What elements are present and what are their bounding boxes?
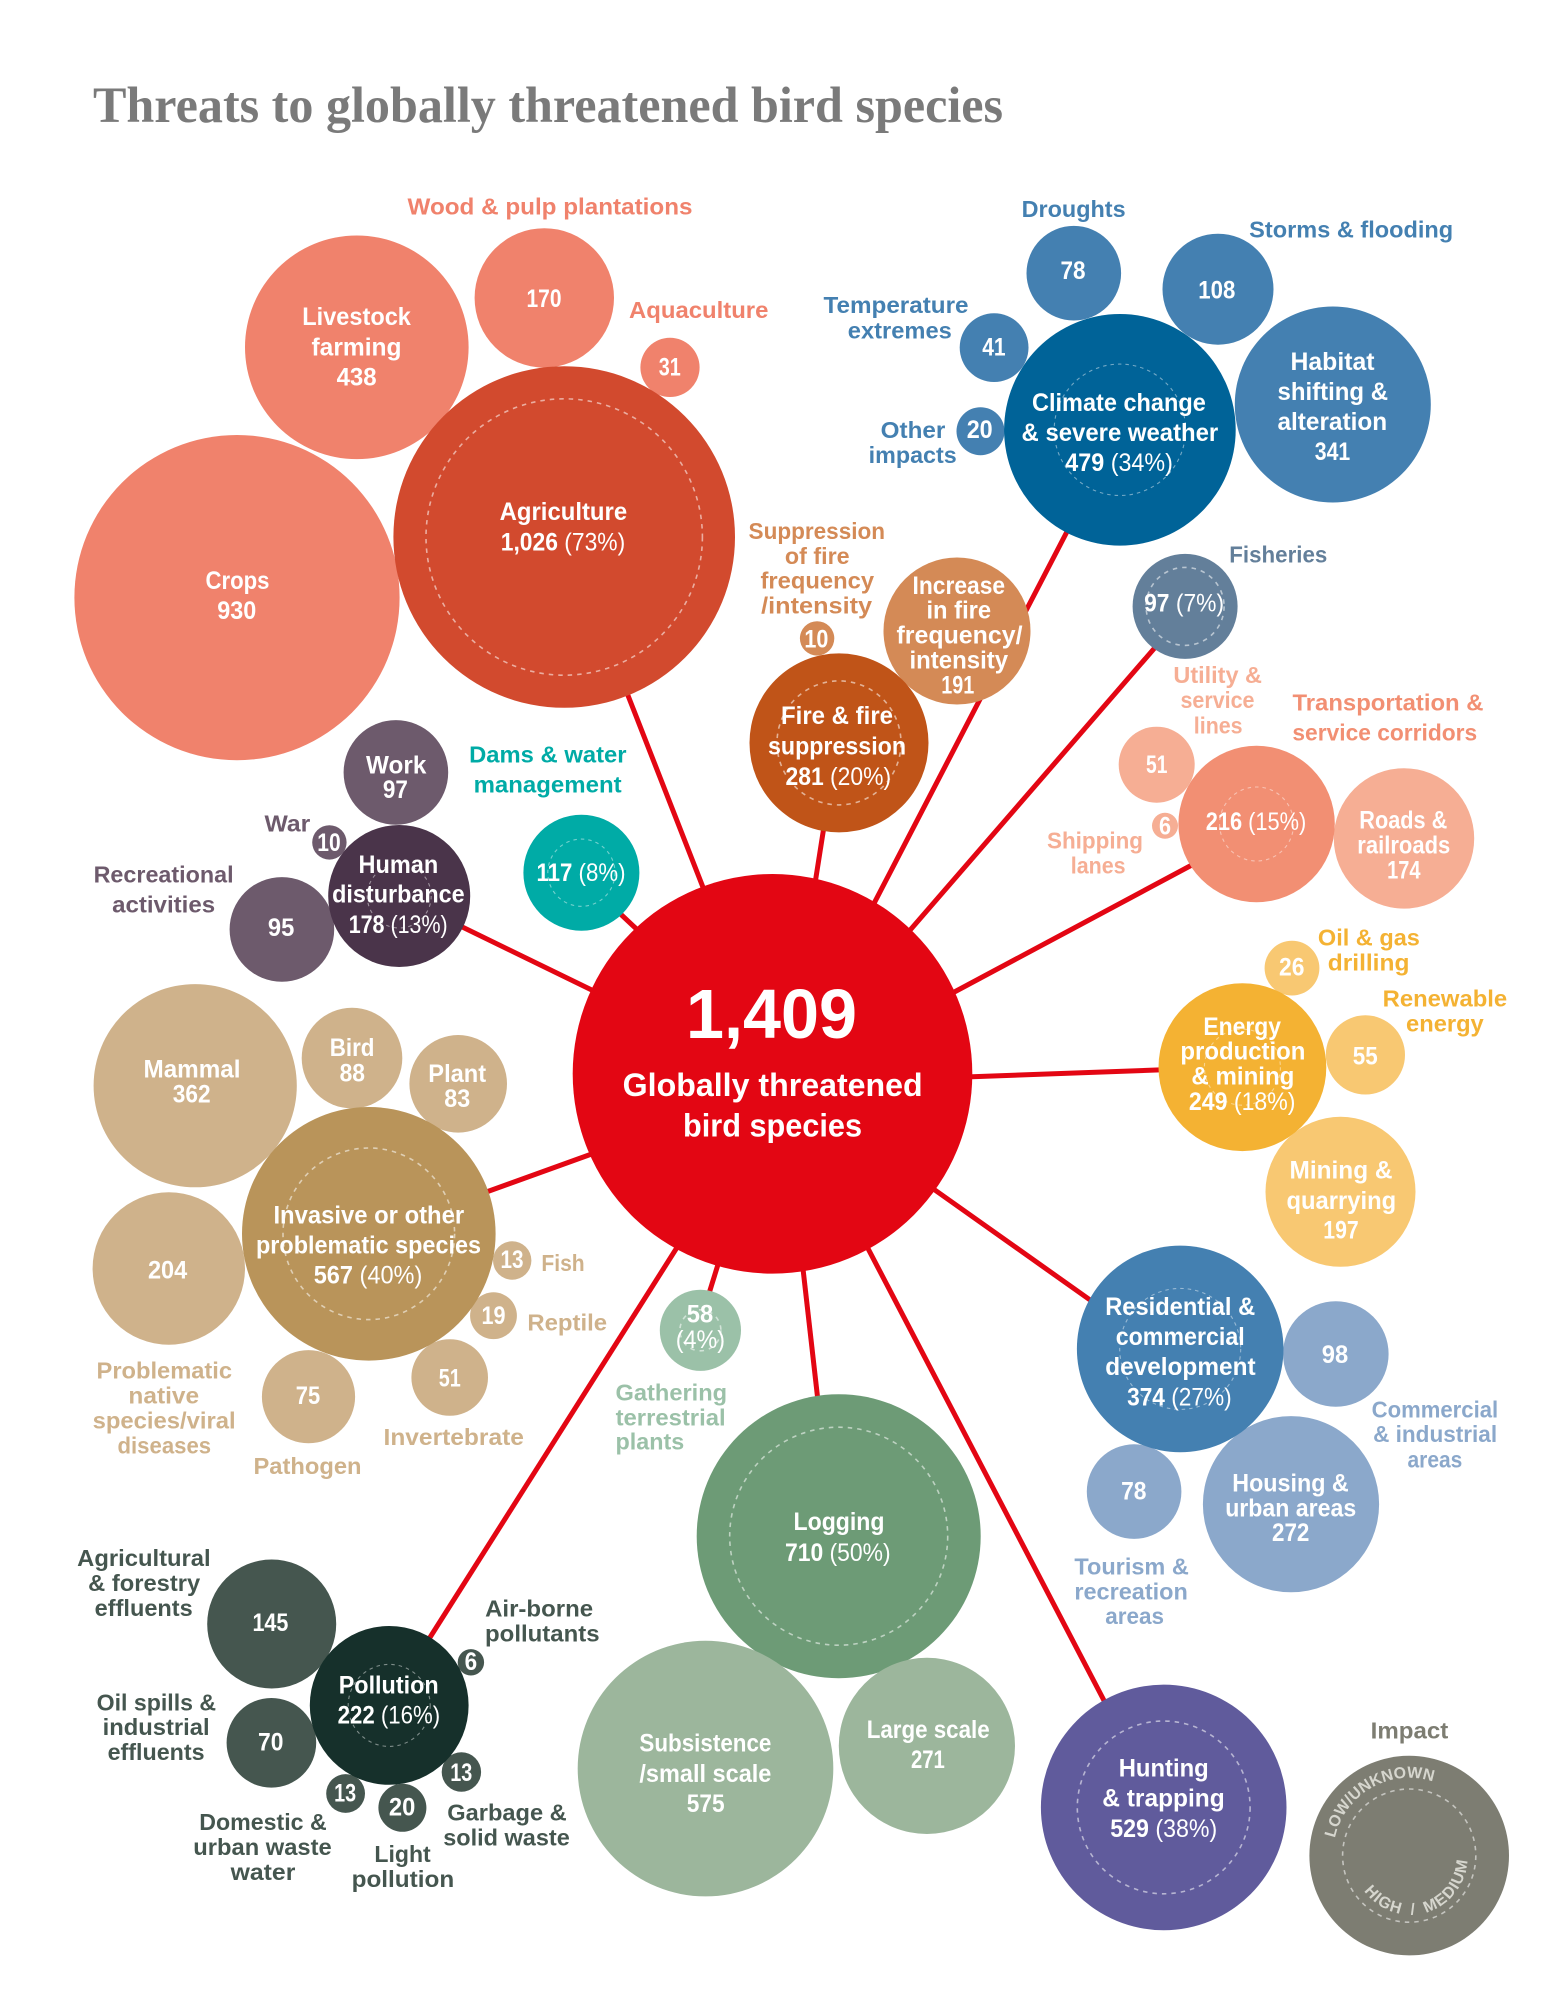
bubble: housing and urban areas <box>1203 1416 1379 1592</box>
bubble: increase in fire: in fire <box>926 597 991 625</box>
label: agricultural and forestry effluents: & forestry <box>88 1570 200 1596</box>
panel: central total <box>573 874 972 1274</box>
bubble: energy production and mining: & mining <box>1191 1063 1294 1091</box>
bubble: aquaculture <box>640 338 700 397</box>
legend heading: Impact <box>1371 1718 1449 1744</box>
label: gathering terrestrial plants: plants <box>616 1428 684 1454</box>
bubble: energy production and mining: Energy <box>1203 1013 1281 1041</box>
bubble: agriculture: 1,026 (73%) <box>501 529 625 557</box>
bubble: habitat shifting: Habitat <box>1290 348 1375 376</box>
bubble: light pollution: 20 <box>389 1793 415 1821</box>
bubble: recreational activities <box>230 877 334 982</box>
bubble: fish <box>493 1241 531 1280</box>
bubble: invasive or other problematic species: Invasive or other <box>273 1202 464 1230</box>
bubble: livestock farming: farming <box>312 333 402 361</box>
bubble: human disturbance <box>328 825 470 967</box>
connector: fisheries <box>905 636 1165 936</box>
connector: transportation <box>945 858 1205 997</box>
label: fish: Fish <box>541 1250 585 1276</box>
bubble: bird <box>302 1008 402 1108</box>
bubble: fish: 13 <box>500 1246 524 1274</box>
label: suppression of fire: Suppression <box>749 518 885 544</box>
bubble: large scale: Large scale <box>867 1716 990 1744</box>
bubble: increase in fire: frequency/ <box>896 621 1023 649</box>
bubble: increase in fire <box>884 558 1030 704</box>
bubble: roads and railroads: Roads & <box>1359 806 1447 834</box>
label: recreational activities: Recreational <box>94 861 234 887</box>
label: garbage and solid waste <box>443 1800 570 1851</box>
connector: pollution <box>422 1238 683 1650</box>
label: suppression of fire: of fire <box>785 543 850 569</box>
bubble: reptile: 19 <box>482 1302 506 1330</box>
bubble: renewable energy: 55 <box>1353 1042 1378 1070</box>
label: utility and service lines <box>1173 662 1262 738</box>
bubble: roads and railroads: 174 <box>1387 856 1421 884</box>
label: temperature extremes <box>824 292 968 343</box>
panel: fire cluster <box>749 518 1030 832</box>
bubble: agriculture <box>393 366 735 708</box>
bubble: pollution <box>310 1626 469 1785</box>
bubble: gathering terrestrial plants: (4%) <box>676 1326 725 1354</box>
panel: central total: bird species <box>683 1108 862 1144</box>
bubble: dams and water management <box>523 815 639 931</box>
label: transportation and service corridors <box>1292 690 1484 746</box>
label: air-borne pollutants: pollutants <box>485 1621 600 1647</box>
label: tourism and recreation areas: recreation <box>1074 1578 1188 1604</box>
bubble: aquaculture: 31 <box>659 354 681 382</box>
label: agricultural and forestry effluents <box>77 1545 211 1621</box>
label: renewable energy: energy <box>1406 1010 1484 1036</box>
title: Threats to globally threatened bird species <box>93 78 1003 134</box>
bubble: bird: Bird <box>330 1034 374 1062</box>
bubble: work <box>344 720 448 825</box>
bubble: energy production and mining: 249 (18%) <box>1189 1088 1296 1116</box>
bubble: work: 97 <box>383 776 408 804</box>
connector: human disturbance <box>450 921 602 995</box>
bubble: increase in fire: 191 <box>941 672 974 700</box>
bubble: war <box>312 825 347 860</box>
label: utility and service lines: service <box>1180 687 1254 713</box>
bubble: human disturbance: 178 (13%) <box>349 911 448 939</box>
bubble: mammal: Mammal <box>144 1056 240 1084</box>
bubble: transportation: 216 (15%) <box>1206 808 1306 836</box>
bubble: logging: 710 (50%) <box>785 1539 891 1567</box>
label: air-borne pollutants: Air-borne <box>485 1596 593 1622</box>
bubble: tourism and recreation areas: 78 <box>1121 1478 1147 1506</box>
bubble: suppression of fire: 10 <box>804 626 828 654</box>
bubble: problematic native species: 204 <box>148 1256 187 1284</box>
bubble: energy production and mining: production <box>1180 1038 1305 1066</box>
label: aquaculture: Aquaculture <box>629 297 768 323</box>
legend bubble <box>1309 1756 1509 1956</box>
label: problematic native species: species/viral <box>93 1408 236 1434</box>
label: tourism and recreation areas: Tourism & <box>1074 1553 1189 1579</box>
label: commercial and industrial areas: Commercial <box>1372 1397 1498 1423</box>
bubble: livestock farming: 438 <box>337 363 377 391</box>
label: agricultural and forestry effluents: Agricultural <box>77 1545 211 1571</box>
label: gathering terrestrial plants: Gathering <box>616 1380 727 1406</box>
connector: fire <box>814 820 825 890</box>
bubble: pollution: Pollution <box>339 1671 439 1699</box>
label: commercial and industrial areas: & industrial <box>1373 1421 1497 1447</box>
label: shipping lanes: Shipping <box>1047 827 1143 853</box>
connector: hunting <box>862 1237 1110 1712</box>
connector: residential <box>925 1183 1100 1307</box>
bubble: agriculture: Agriculture <box>500 498 627 526</box>
bubble: invertebrate: 51 <box>439 1364 461 1392</box>
label: problematic native species: diseases <box>118 1432 211 1458</box>
bubble: housing and urban areas: urban areas <box>1225 1495 1356 1523</box>
bubble: livestock farming: Livestock <box>302 303 411 331</box>
label: domestic and urban waste water <box>193 1809 332 1885</box>
label: transportation and service corridors: service corridors <box>1292 720 1477 746</box>
bubble: utility and service lines <box>1119 727 1195 803</box>
bubble: shipping lanes: 6 <box>1159 812 1171 840</box>
bubble: subsistence small scale: 575 <box>687 1790 725 1818</box>
panel: transportation cluster <box>1047 662 1484 909</box>
bubble: other impacts: 20 <box>967 416 993 444</box>
label: problematic native species: Problematic <box>97 1357 232 1383</box>
connector: energy <box>965 1070 1170 1077</box>
bubble: fire and fire suppression: suppression <box>768 732 906 760</box>
bubble: suppression of fire <box>800 621 834 656</box>
bubble: habitat shifting: alteration <box>1278 408 1387 436</box>
bubble: increase in fire: intensity <box>910 646 1008 674</box>
bubble: agricultural and forestry effluents: 145 <box>252 1609 288 1637</box>
panel: hunting and trapping <box>1041 1685 1286 1930</box>
panel: pollution cluster <box>77 1545 600 1892</box>
panel: human disturbance cluster <box>94 720 470 982</box>
bubble: transportation <box>1178 746 1335 902</box>
bubble: fisheries: 97 (7%) <box>1144 589 1224 617</box>
bubble: fire and fire suppression: 281 (20%) <box>786 763 891 791</box>
bubble: pathogen <box>262 1350 355 1443</box>
bubble: temperature extremes: 41 <box>982 333 1006 361</box>
bubble: bird: 88 <box>340 1060 365 1088</box>
bubble: habitat shifting: 341 <box>1315 438 1350 466</box>
bubble: temperature extremes <box>960 313 1028 382</box>
bubble: fisheries <box>1133 554 1238 659</box>
bubble: dams and water management: 117 (8%) <box>536 859 626 887</box>
bubble: human disturbance: Human <box>359 851 438 879</box>
panel: hunting and trapping: Hunting <box>1119 1755 1209 1783</box>
bubble: reptile <box>470 1292 517 1339</box>
bubble: war: 10 <box>317 829 341 857</box>
bubble: agricultural and forestry effluents <box>207 1560 336 1688</box>
label: renewable energy <box>1383 986 1507 1036</box>
connector: dams <box>612 906 645 937</box>
label: domestic and urban waste water: water <box>230 1859 295 1885</box>
bubble: logging <box>697 1394 981 1678</box>
bubble: large scale <box>839 1658 1015 1834</box>
bubble: human disturbance: disturbance <box>332 880 465 908</box>
panel: impact legend <box>1309 1718 1509 1956</box>
legend bubble: LOW/UNKNOWN <box>1324 1766 1435 1838</box>
bubble: invertebrate <box>411 1339 488 1416</box>
bubble: fire and fire suppression <box>750 653 928 832</box>
bubble: droughts: 78 <box>1060 257 1086 285</box>
bubble: housing and urban areas: 272 <box>1272 1519 1309 1547</box>
label: commercial and industrial areas: areas <box>1408 1447 1462 1473</box>
bubble: plant <box>409 1035 507 1133</box>
label: temperature extremes: extremes <box>848 317 952 343</box>
bubble: mining and quarrying: quarrying <box>1286 1187 1396 1215</box>
bubble: mining and quarrying: Mining & <box>1290 1157 1392 1185</box>
bubble: residential and commercial development: development <box>1105 1353 1256 1381</box>
label: pathogen: Pathogen <box>254 1453 362 1479</box>
panel: fisheries <box>1133 541 1327 659</box>
bubble: residential and commercial development: 374 (27%) <box>1127 1384 1232 1412</box>
label: tourism and recreation areas <box>1074 1553 1189 1629</box>
bubble: garbage and solid waste <box>442 1752 481 1792</box>
label: dams and water management: management <box>474 772 622 798</box>
bubble: mining and quarrying: 197 <box>1323 1216 1359 1244</box>
bubble: mammal: 362 <box>173 1080 211 1108</box>
bubble: utility and service lines: 51 <box>1146 751 1167 779</box>
bubble: plant: 83 <box>444 1085 470 1113</box>
panel: hunting and trapping: & trapping <box>1102 1784 1225 1812</box>
label: transportation and service corridors: Transportation & <box>1292 690 1484 716</box>
label: problematic native species <box>93 1357 236 1458</box>
label: oil and gas drilling: Oil & gas <box>1318 925 1420 951</box>
label: tourism and recreation areas: areas <box>1105 1603 1164 1629</box>
label: oil spills and industrial effluents: industrial <box>103 1714 210 1740</box>
connector: invasive <box>478 1151 600 1195</box>
label: shipping lanes <box>1047 827 1143 878</box>
bubble: climate change: Climate change <box>1032 389 1206 417</box>
label: air-borne pollutants <box>485 1596 600 1647</box>
bubble: livestock farming <box>245 235 469 459</box>
label: utility and service lines: Utility & <box>1173 662 1262 688</box>
bubble: crops: Crops <box>206 567 270 595</box>
bubble: storms and flooding <box>1162 234 1274 345</box>
label: garbage and solid waste: Garbage & <box>447 1800 567 1826</box>
bubble: residential and commercial development <box>1077 1246 1283 1452</box>
label: recreational activities: activities <box>112 891 215 917</box>
panel: climate change cluster <box>824 196 1453 546</box>
label: light pollution <box>352 1841 454 1892</box>
bubble: roads and railroads <box>1334 768 1474 909</box>
connector lines <box>422 522 1205 1712</box>
bubble: subsistence small scale <box>578 1641 833 1896</box>
bubble: oil spills and industrial effluents: 70 <box>258 1728 283 1756</box>
bubble: commercial and industrial areas <box>1283 1301 1389 1407</box>
bubble: domestic and urban waste water <box>326 1774 365 1813</box>
bubble: air-borne pollutants: 6 <box>465 1648 477 1676</box>
bubble: subsistence small scale: Subsistence <box>639 1730 771 1758</box>
label: shipping lanes: lanes <box>1071 852 1126 878</box>
label: wood and pulp plantations: Wood & pulp plantations <box>408 194 692 220</box>
bubble: roads and railroads: railroads <box>1357 832 1450 860</box>
bubble: recreational activities: 95 <box>268 914 294 942</box>
panel: gathering terrestrial plants <box>616 1290 741 1454</box>
label: droughts: Droughts <box>1022 196 1126 222</box>
bubble: fire and fire suppression: Fire & fire <box>781 702 893 730</box>
bubble: residential and commercial development: Residential & <box>1105 1293 1255 1321</box>
label: temperature extremes: Temperature <box>824 292 968 318</box>
bubble: invasive or other problematic species <box>242 1107 496 1361</box>
bubble: storms and flooding: 108 <box>1198 277 1235 305</box>
bubble: renewable energy <box>1326 1015 1405 1094</box>
bubble: subsistence small scale: /small scale <box>639 1760 771 1788</box>
bubble: droughts <box>1026 226 1121 320</box>
bubble: climate change: & severe weather <box>1022 419 1218 447</box>
label: oil spills and industrial effluents <box>97 1690 216 1765</box>
bubble: climate change <box>1004 314 1236 546</box>
label: storms and flooding: Storms & flooding <box>1249 217 1453 243</box>
bubble: shipping lanes <box>1152 812 1178 840</box>
bubble: gathering terrestrial plants: 58 <box>687 1300 713 1328</box>
bubble: invasive or other problematic species: problematic species <box>256 1232 481 1260</box>
connector: climate change <box>868 522 1072 915</box>
label: dams and water management <box>469 742 627 798</box>
bubble: plant: Plant <box>428 1060 487 1088</box>
label: other impacts: impacts <box>869 442 957 468</box>
bubble: air-borne pollutants <box>458 1648 484 1676</box>
bubble: commercial and industrial areas: 98 <box>1322 1341 1348 1369</box>
connector: agriculture <box>620 675 706 895</box>
connector: gathering <box>707 1258 720 1300</box>
bubble: domestic and urban waste water: 13 <box>334 1780 356 1808</box>
bubble: oil and gas drilling <box>1265 941 1319 995</box>
label: renewable energy: Renewable <box>1383 986 1507 1012</box>
panel: energy cluster <box>1158 925 1507 1267</box>
label: fisheries: Fisheries <box>1229 541 1327 567</box>
label: dams and water management: Dams & water <box>469 742 627 768</box>
label: problematic native species: native <box>128 1382 199 1408</box>
label: suppression of fire <box>749 518 885 619</box>
panel: residential cluster <box>1074 1246 1498 1629</box>
label: reptile: Reptile <box>527 1309 607 1335</box>
label: other impacts: Other <box>881 417 945 443</box>
label: garbage and solid waste: solid waste <box>443 1825 570 1851</box>
connector: logging <box>802 1260 819 1410</box>
bubble: other impacts <box>956 407 1004 455</box>
label: oil and gas drilling: drilling <box>1328 949 1409 975</box>
bubble: wood and pulp plantations <box>475 228 614 368</box>
label: light pollution: Light <box>374 1841 431 1867</box>
label: suppression of fire: /intensity <box>761 593 872 619</box>
bubble: crops <box>74 435 400 760</box>
panel: agriculture cluster <box>74 194 768 760</box>
label: commercial and industrial areas <box>1372 1397 1498 1473</box>
label: recreational activities <box>94 861 234 917</box>
label: light pollution: pollution <box>352 1866 454 1892</box>
label: oil spills and industrial effluents: effluents <box>108 1739 205 1765</box>
bubble: wood and pulp plantations: 170 <box>526 285 562 313</box>
panel: central total: Globally threatened <box>623 1067 923 1103</box>
bubble: residential and commercial development: commercial <box>1116 1323 1245 1351</box>
bubble: increase in fire: Increase <box>912 572 1005 600</box>
legend bubble: HIGH / MEDIUM <box>1364 1860 1468 1915</box>
bubble: large scale: 271 <box>911 1746 945 1774</box>
label: oil spills and industrial effluents: Oil spills & <box>97 1690 216 1716</box>
panel: central total: 1,409 <box>686 975 857 1053</box>
bubble: mining and quarrying <box>1266 1117 1416 1267</box>
label: gathering terrestrial plants: terrestrial <box>616 1404 726 1430</box>
bubble: crops: 930 <box>217 597 256 625</box>
label: other impacts <box>869 417 957 468</box>
label: oil and gas drilling <box>1318 925 1420 975</box>
bubble: oil spills and industrial effluents <box>227 1698 316 1788</box>
bubble: logging: Logging <box>794 1508 884 1536</box>
bubble: pathogen: 75 <box>296 1382 320 1410</box>
panel: logging cluster <box>578 1394 1015 1896</box>
bubble: oil and gas drilling: 26 <box>1279 954 1304 982</box>
bubble: habitat shifting: shifting & <box>1278 378 1388 406</box>
label: gathering terrestrial plants <box>616 1380 727 1454</box>
bubble: light pollution <box>378 1784 426 1832</box>
bubble: problematic native species <box>93 1192 245 1345</box>
bubble: pollution: 222 (16%) <box>338 1701 440 1729</box>
bubble: garbage and solid waste: 13 <box>450 1759 472 1787</box>
panel: dams and water management <box>469 742 639 931</box>
bubble: work: Work <box>366 751 426 779</box>
bubble: invasive or other problematic species: 567 (40%) <box>314 1262 422 1290</box>
label: agricultural and forestry effluents: effluents <box>95 1595 193 1621</box>
bubble: habitat shifting <box>1235 306 1431 502</box>
bubble: tourism and recreation areas <box>1087 1444 1181 1539</box>
label: domestic and urban waste water: Domestic & <box>199 1809 327 1835</box>
label: invertebrate: Invertebrate <box>384 1424 524 1450</box>
label: domestic and urban waste water: urban waste <box>193 1834 332 1860</box>
bubble: mammal <box>94 984 297 1187</box>
bubble: housing and urban areas: Housing & <box>1232 1469 1349 1497</box>
panel: invasive species cluster <box>93 984 607 1479</box>
label: war: War <box>264 810 310 836</box>
bubble: energy production and mining <box>1158 983 1326 1151</box>
label: utility and service lines: lines <box>1194 712 1243 738</box>
bubble: climate change: 479 (34%) <box>1065 449 1173 477</box>
panel: hunting and trapping: 529 (38%) <box>1110 1815 1217 1843</box>
bubble: gathering terrestrial plants <box>660 1290 741 1371</box>
label: suppression of fire: frequency <box>760 568 874 594</box>
